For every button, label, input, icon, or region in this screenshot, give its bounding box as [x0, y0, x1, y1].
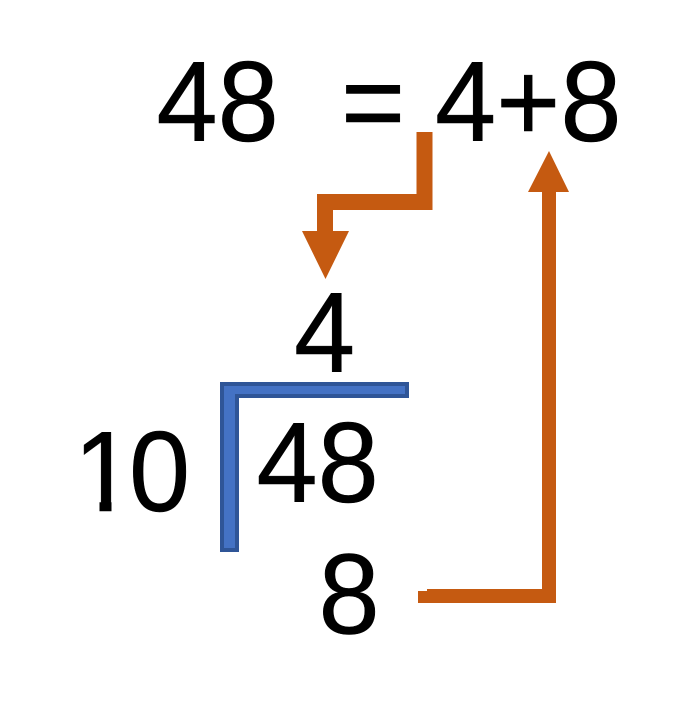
arrow: from tens digit down to quotient	[302, 132, 432, 279]
equation: 48 = 4+8: 4+8	[435, 37, 622, 165]
dividend: 48: 48	[256, 398, 379, 526]
equation: 48 = 4+8: =	[341, 37, 405, 165]
equation: 48 = 4+8: 48	[156, 37, 279, 165]
divisor: 10: 1	[74, 407, 135, 535]
divisor: 10: 0	[129, 407, 190, 535]
remainder: 8: 8	[318, 530, 380, 658]
long division bracket	[222, 384, 407, 550]
divisor: 10	[66, 407, 190, 535]
arrow: from remainder up to ones digit	[418, 151, 569, 603]
quotient: 4: 4	[294, 268, 355, 396]
equation: 48 = 4+8	[156, 37, 622, 165]
